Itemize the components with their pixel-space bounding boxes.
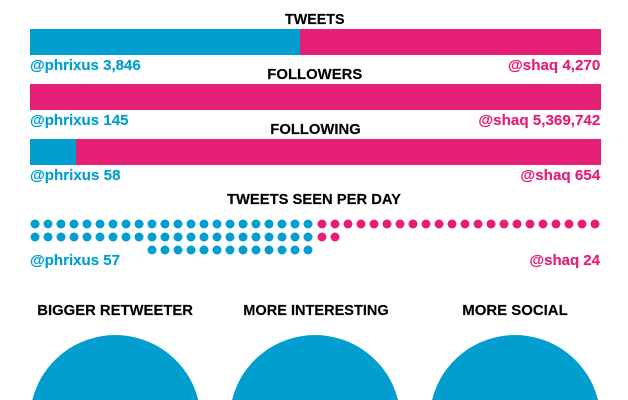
- heading: tweets seen per day: TWEETS SEEN PER DAY: [227, 192, 401, 208]
- label: phrixus followers: @phrixus 145: [30, 112, 128, 129]
- heading: more social: MORE SOCIAL: [462, 303, 568, 319]
- label: phrixus tweets seen: @phrixus 57: [30, 252, 120, 269]
- circle: more social: [432, 335, 598, 400]
- dot chart: shaq tweets seen: [318, 220, 600, 242]
- label: shaq followers: @shaq 5,369,742: [478, 112, 600, 129]
- label: phrixus tweets: @phrixus 3,846: [30, 57, 141, 74]
- heading: tweets: TWEETS: [285, 12, 345, 28]
- panel: more interesting: [232, 303, 398, 400]
- bar: followers comparison: [30, 84, 601, 110]
- heading: followers: FOLLOWERS: [267, 67, 363, 83]
- heading: following: FOLLOWING: [270, 122, 361, 138]
- label: shaq tweets: @shaq 4,270: [508, 57, 600, 74]
- panel: more social: [432, 303, 598, 400]
- label: phrixus following: @phrixus 58: [30, 167, 120, 184]
- bar: tweets comparison: [30, 29, 601, 55]
- label: shaq tweets seen: @shaq 24: [530, 252, 601, 269]
- tweets section: [30, 12, 601, 74]
- following section: [30, 122, 601, 184]
- circle: bigger retweeter: [32, 335, 198, 400]
- dot chart: phrixus tweets seen: [30, 220, 312, 254]
- heading: bigger retweeter: BIGGER RETWEETER: [37, 303, 194, 319]
- label: shaq following: @shaq 654: [520, 167, 601, 184]
- bar: following comparison: [30, 139, 601, 165]
- panel: bigger retweeter: [32, 303, 198, 400]
- tweets seen per day section: [30, 192, 601, 269]
- followers section: [30, 67, 601, 129]
- circle: more interesting: [232, 335, 398, 400]
- heading: more interesting: MORE INTERESTING: [243, 303, 389, 319]
